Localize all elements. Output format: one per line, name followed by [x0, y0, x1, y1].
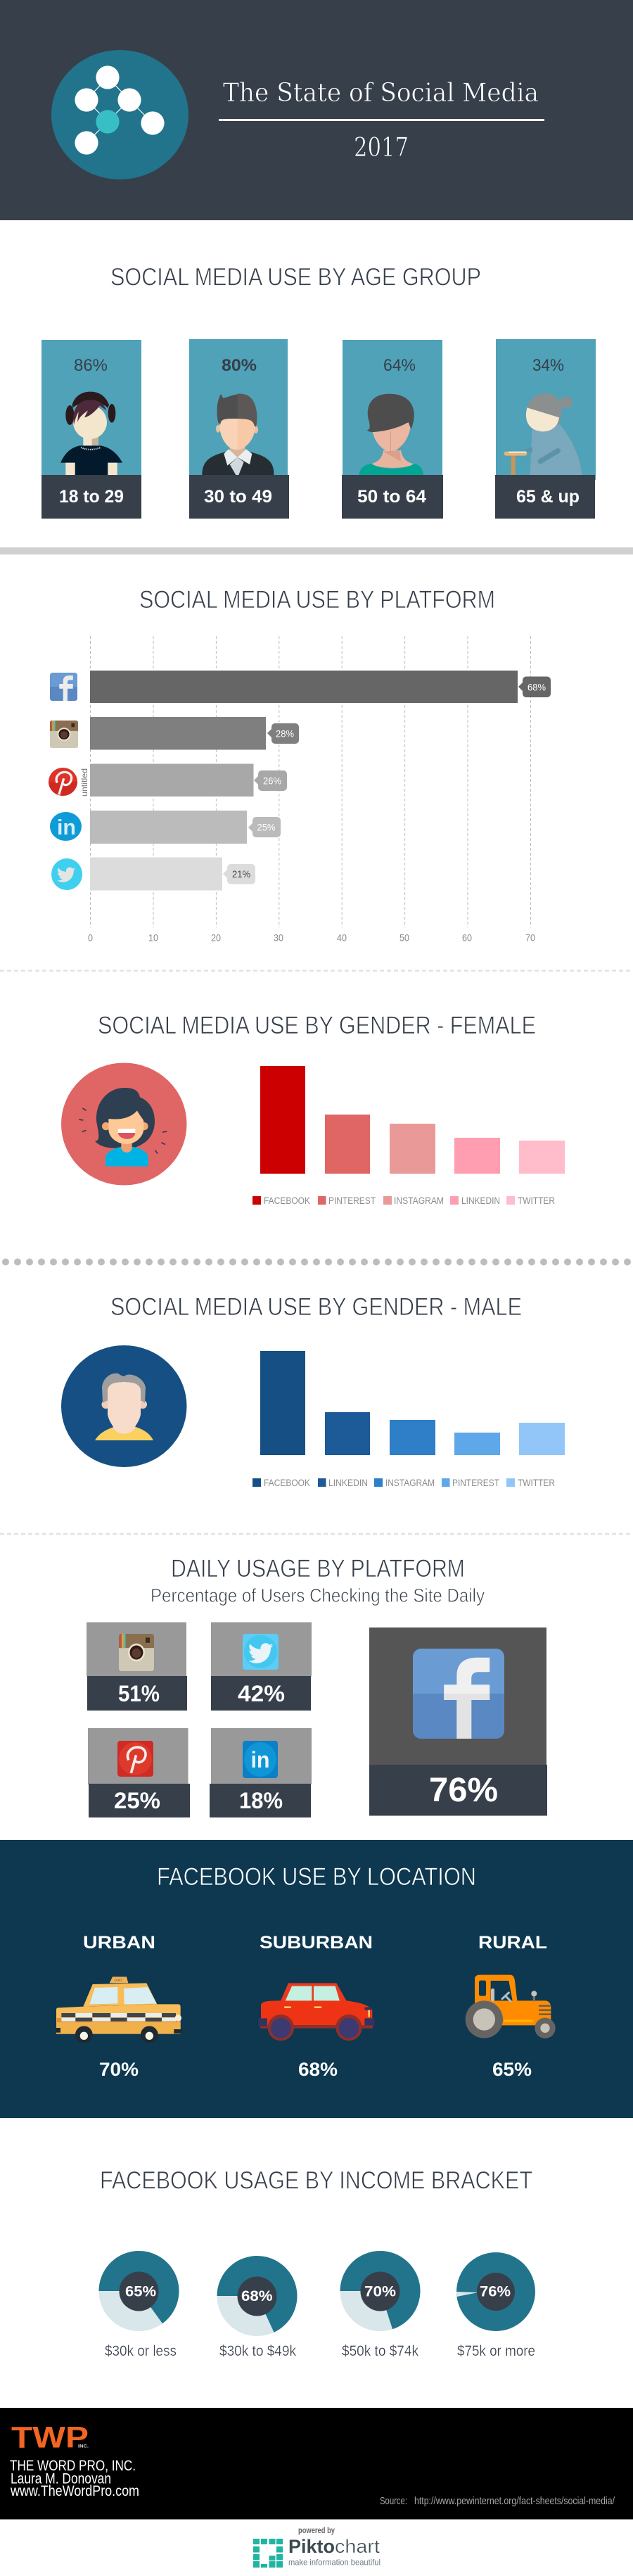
panel: age 50 to 64: 64%	[383, 356, 416, 375]
icon: twitter	[51, 858, 82, 890]
tagline: make information beautiful	[288, 2558, 381, 2568]
heading: platform: SOCIAL MEDIA USE BY PLATFORM	[139, 586, 495, 614]
donut chart: $30k or less: $30k or less	[105, 2343, 177, 2359]
title: The State of Social Media	[223, 79, 539, 108]
location: suburban: SUBURBAN	[260, 1933, 373, 1953]
logo: powered by piktochart	[253, 2525, 381, 2568]
icon: middle-aged woman	[359, 394, 423, 475]
legend: female: PINTEREST	[328, 1195, 376, 1206]
heading: daily usage: DAILY USAGE BY PLATFORM	[171, 1555, 465, 1582]
legend: male: PINTEREST	[452, 1477, 499, 1488]
icon: facebook	[50, 673, 77, 701]
bar chart: use by platform	[49, 636, 551, 943]
donut chart: $30k or less: 65%	[125, 2284, 156, 2299]
bar: linkedin 25%	[90, 811, 281, 844]
tile: linkedin 18%	[210, 1728, 312, 1817]
panel: age 65 and up: 34%	[532, 356, 564, 375]
x axis labels: 50	[399, 932, 409, 943]
panel: age 30 to 49	[189, 339, 289, 519]
bar chart: female	[252, 1066, 565, 1206]
bar: twitter 21%: 21%	[232, 868, 250, 880]
legend: male: INSTAGRAM	[385, 1477, 435, 1488]
location: urban	[56, 1933, 182, 2080]
location: urban: 70%	[99, 2059, 139, 2080]
tile: pinterest 25%: 25%	[114, 1788, 160, 1813]
location: rural	[466, 1933, 556, 2080]
x axis labels: 70	[525, 932, 535, 943]
panel: age 50 to 64: 50 to 64	[357, 487, 426, 507]
wordmark: Pikto	[288, 2536, 335, 2557]
legend: male: FACEBOOK	[264, 1477, 311, 1488]
icon: linkedin: in	[250, 1746, 269, 1772]
legend: female: TWITTER	[518, 1195, 555, 1206]
icon: linkedin	[50, 812, 82, 841]
donut chart: $30k to $49k: 68%	[241, 2288, 273, 2304]
location: urban: URBAN	[83, 1933, 155, 1953]
panel: age 18 to 29: 18 to 29	[59, 487, 124, 507]
donut chart: $50k to $74k: 70%	[364, 2284, 396, 2299]
bar: pinterest 26%	[90, 764, 287, 797]
legend: male: TWITTER	[518, 1477, 555, 1488]
credits: www.TheWordPro.com	[10, 2483, 139, 2499]
x axis labels	[88, 932, 535, 943]
panel: age 18 to 29: 86%	[74, 356, 108, 375]
donut chart: $30k to $49k: $30k to $49k	[219, 2343, 296, 2359]
location: suburban	[258, 1933, 375, 2080]
heading: age group: SOCIAL MEDIA USE BY AGE GROUP	[110, 263, 481, 291]
icon: female avatar	[61, 1062, 187, 1185]
logo: TWP: TWP	[11, 2420, 89, 2454]
icon: taxi: IXAT	[114, 1979, 123, 1983]
tile: instagram 51%	[87, 1623, 187, 1711]
donut chart: $75k or more: $75k or more	[457, 2343, 535, 2359]
logo: TWP: INC.	[78, 2444, 89, 2449]
icon: instagram	[119, 1634, 154, 1671]
heading: location: FACEBOOK USE BY LOCATION	[157, 1863, 476, 1891]
panel: age 50 to 64	[342, 340, 443, 519]
panel: facebook use by location	[0, 1840, 633, 2118]
x axis labels: 40	[337, 932, 347, 943]
donut chart: $50k to $74k	[340, 2251, 421, 2359]
bar chart: male	[252, 1351, 565, 1488]
logo: powered by piktochart: chart	[335, 2536, 381, 2557]
legend: male	[252, 1477, 555, 1488]
icon: man	[202, 394, 274, 475]
donut chart: $75k or more	[456, 2252, 535, 2359]
legend: female: FACEBOOK	[264, 1195, 311, 1206]
panel: footer	[0, 2408, 633, 2519]
donut chart: $30k to $49k	[217, 2256, 297, 2359]
tile: twitter 42%: 42%	[238, 1681, 285, 1706]
icon: male avatar	[61, 1345, 187, 1467]
icon: network logo	[51, 50, 188, 179]
location: rural: RURAL	[478, 1933, 547, 1953]
credits: THE WORD PRO, INC.	[10, 2458, 136, 2474]
icon: young woman	[60, 392, 122, 475]
bar: instagram 28%	[90, 717, 299, 750]
logo: powered by piktochart: powered by	[298, 2525, 335, 2535]
tile: instagram 51%: 51%	[118, 1681, 160, 1706]
icon: pinterest	[117, 1741, 153, 1777]
x axis labels: 30	[274, 932, 283, 943]
bar: linkedin 25%: 25%	[257, 822, 276, 833]
bar: facebook 68%: 68%	[528, 681, 546, 692]
subheading: daily usage: Percentage of Users Checking the Site Daily	[151, 1585, 485, 1606]
icon: tractor	[466, 1975, 556, 2038]
bar: pinterest 26%: 26%	[263, 775, 281, 787]
axis label: untitled: untitled	[79, 768, 89, 797]
panel: age 30 to 49: 30 to 49	[204, 487, 272, 507]
legend: female: LINKEDIN	[461, 1195, 500, 1206]
icon: facebook	[413, 1649, 504, 1739]
x axis labels: 20	[211, 932, 221, 943]
source: Source:	[380, 2495, 407, 2507]
x axis labels: 60	[462, 932, 472, 943]
icon: linkedin: in	[57, 815, 76, 839]
icon: instagram	[50, 721, 78, 748]
icon: elderly woman	[504, 393, 582, 475]
tile: linkedin 18%: 18%	[239, 1788, 283, 1813]
x axis labels: 10	[148, 932, 158, 943]
heading: income: FACEBOOK USAGE BY INCOME BRACKET	[100, 2167, 532, 2194]
tile: twitter 42%	[211, 1623, 312, 1711]
panel: header	[0, 0, 633, 220]
legend: male: LINKEDIN	[328, 1477, 368, 1488]
panel: age 18 to 29	[41, 340, 141, 519]
bar: twitter 21%	[90, 857, 255, 891]
tile: facebook 76%	[369, 1628, 547, 1815]
credits: Laura M. Donovan	[11, 2471, 111, 2487]
x axis labels: 0	[88, 932, 93, 943]
icon: piktochart mark	[253, 2539, 283, 2568]
legend: female: INSTAGRAM	[394, 1195, 444, 1206]
location: suburban: 68%	[298, 2059, 338, 2080]
icon: twitter	[243, 1634, 279, 1670]
icon: taxi	[56, 1977, 182, 2043]
panel: age 65 and up: 65 & up	[516, 487, 580, 507]
tile: facebook 76%: 76%	[429, 1772, 498, 1809]
heading: female: SOCIAL MEDIA USE BY GENDER - FEMALE	[98, 1012, 536, 1039]
icon: red car	[258, 1983, 375, 2041]
year: 2017	[354, 132, 409, 163]
bar: facebook 68%	[90, 671, 551, 703]
panel: age 30 to 49: 80%	[222, 356, 257, 375]
legend: female	[252, 1195, 555, 1206]
donut chart: $30k or less	[98, 2251, 179, 2359]
panel: age 65 and up	[495, 339, 596, 519]
donut chart: $75k or more: 76%	[480, 2284, 511, 2299]
icon: linkedin	[243, 1741, 278, 1778]
heading: male: SOCIAL MEDIA USE BY GENDER - MALE	[110, 1293, 522, 1321]
donut chart: $50k to $74k: $50k to $74k	[342, 2343, 418, 2359]
icon: pinterest	[49, 768, 77, 796]
tile: pinterest 25%	[88, 1728, 190, 1817]
location: rural: 65%	[492, 2059, 532, 2080]
bar: instagram 28%: 28%	[276, 728, 294, 739]
credits	[10, 2458, 139, 2499]
